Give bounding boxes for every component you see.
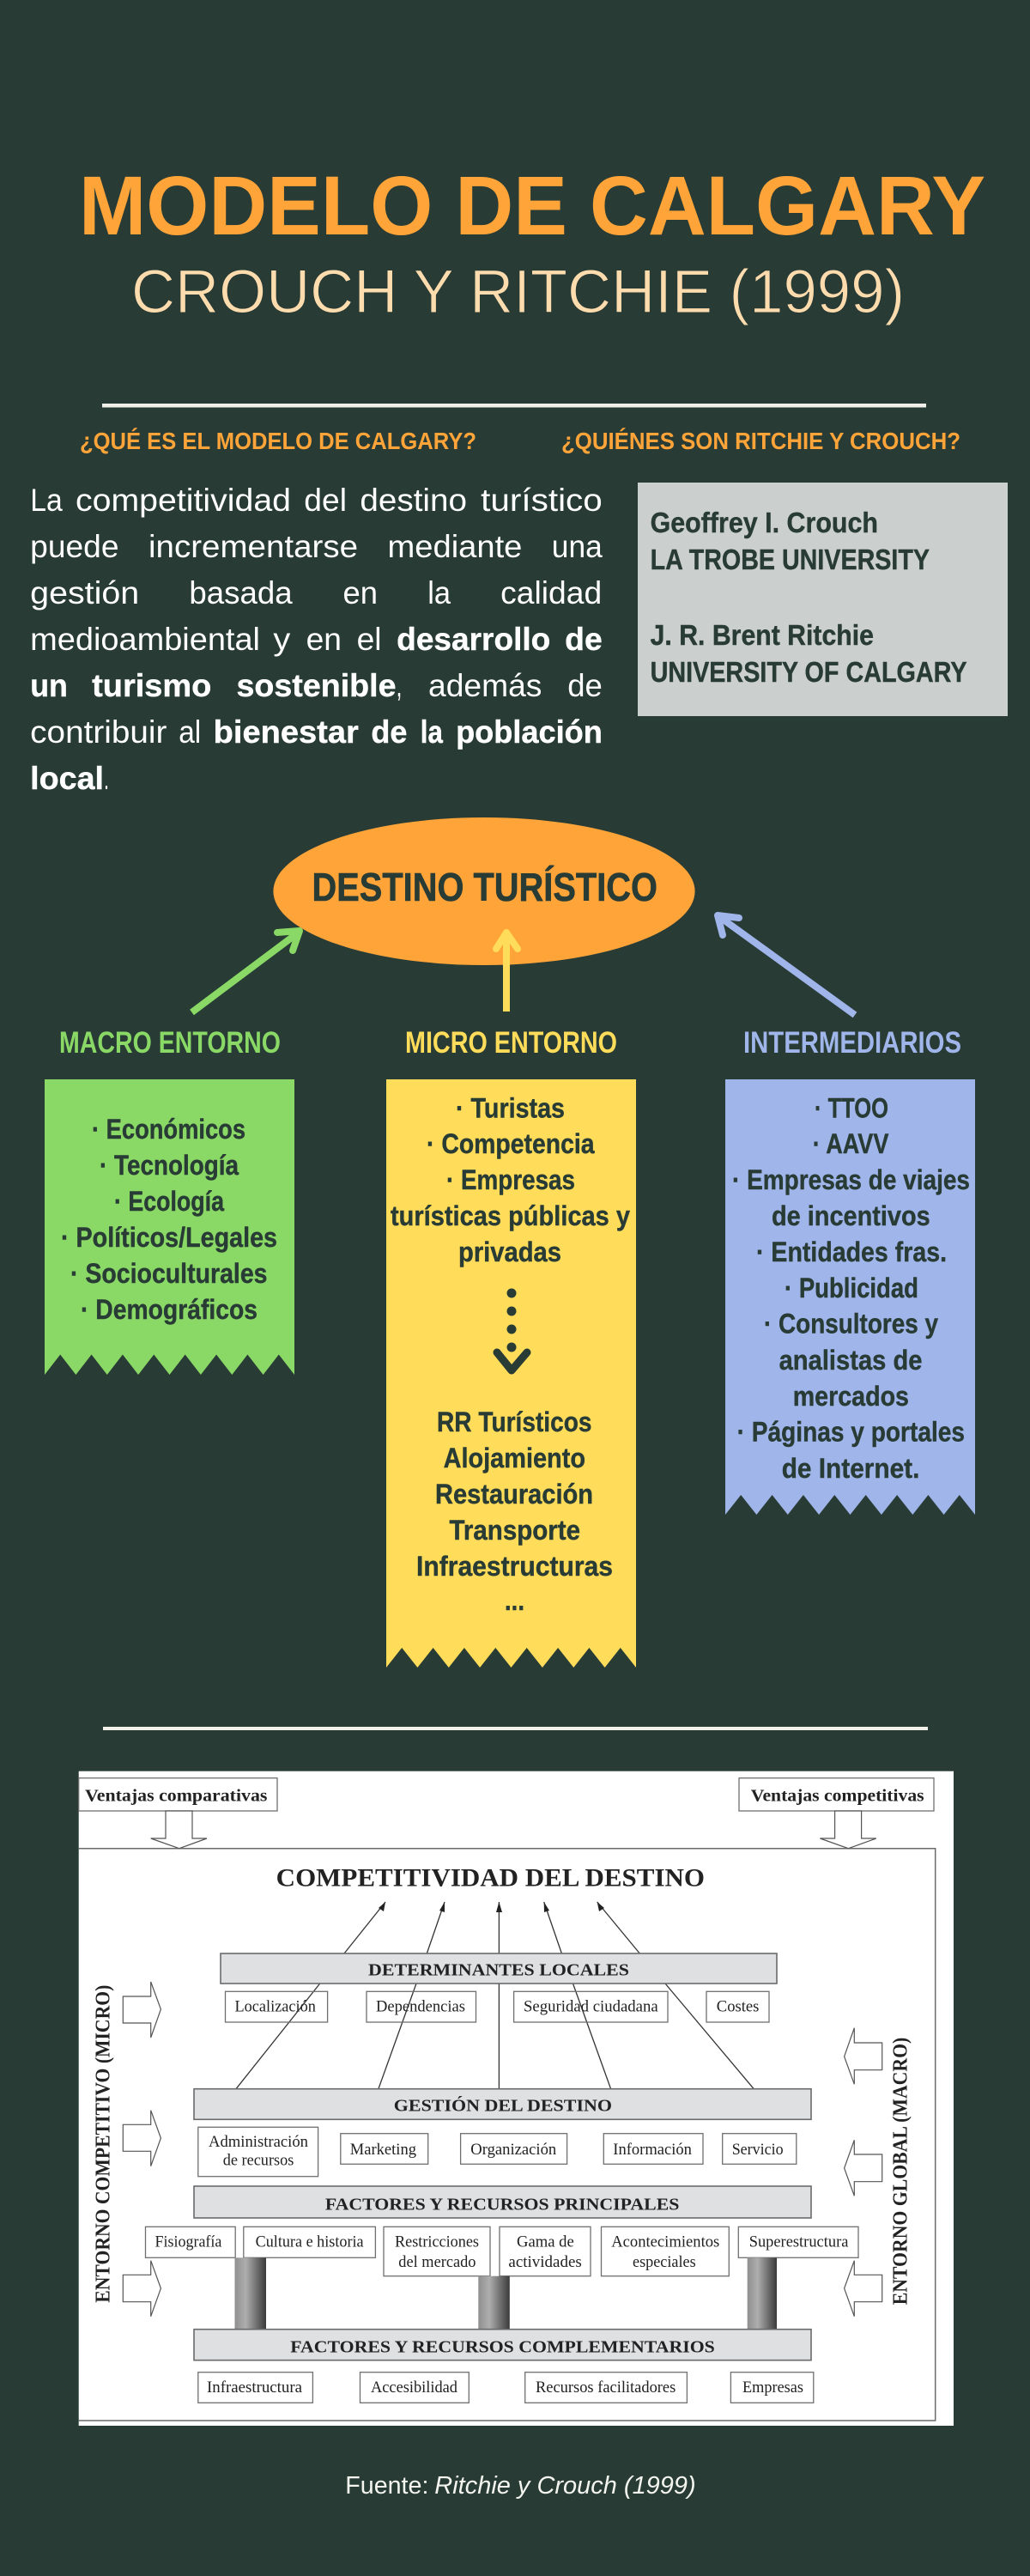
- panel: intermediarios: de incentivos: [772, 1200, 930, 1231]
- box: gama de actividades: actividades: [508, 2253, 582, 2271]
- text block: definition paragraph: la: [427, 575, 451, 611]
- panel: micro entorno: ...: [505, 1585, 524, 1616]
- text block: definition paragraph: mediante: [388, 529, 522, 564]
- subtitle: CROUCH Y RITCHIE (1999): [131, 258, 905, 326]
- panel: macro entorno: · Demográficos: [81, 1294, 258, 1325]
- box: ventajas comparativas: Ventajas comparativas: [85, 1786, 268, 1805]
- panel: micro entorno: RR Turísticos: [437, 1406, 592, 1437]
- arrow: comparativas down: [151, 1811, 207, 1849]
- box: seguridad ciudadana: Seguridad ciudadana: [524, 1998, 658, 2016]
- text block: definition paragraph: turístico: [481, 483, 603, 518]
- panel: intermediarios: · Páginas y portales: [737, 1417, 965, 1448]
- panel: intermediarios: · Empresas de viajes: [732, 1164, 970, 1195]
- text block: definition paragraph: en: [306, 622, 342, 657]
- box: administración de recursos: de recursos: [223, 2152, 294, 2170]
- panel: micro entorno: [386, 1079, 636, 1668]
- panel: intermediarios: de Internet.: [782, 1453, 919, 1484]
- box: seguridad ciudadana: [514, 1991, 668, 2022]
- box: acontecimientos especiales: [601, 2227, 729, 2276]
- box: información: Información: [613, 2141, 692, 2159]
- box: ventajas comparativas: [79, 1778, 277, 1811]
- box: restricciones del mercado: [384, 2227, 490, 2276]
- box: gama de actividades: Gama de: [517, 2233, 574, 2251]
- box: ventajas competitivas: Ventajas competitivas: [751, 1786, 924, 1805]
- text block: definition paragraph: gestión: [30, 575, 139, 611]
- bar: gestión del destino: GESTIÓN DEL DESTINO: [394, 2094, 612, 2115]
- box: gama de actividades: [500, 2227, 591, 2276]
- panel: intermediarios: analistas de: [779, 1345, 922, 1376]
- text block: definition paragraph: en: [343, 575, 378, 611]
- box: cultura e historia: Cultura e historia: [256, 2233, 364, 2251]
- box: restricciones del mercado: del mercado: [398, 2253, 476, 2271]
- destination ellipse: [273, 817, 695, 965]
- bar: determinantes locales: DETERMINANTES LOCALES: [368, 1961, 629, 1980]
- author: Crouch: LA TROBE UNIVERSITY: [651, 544, 930, 575]
- bar: factores y recursos principales: FACTORES Y RECURSOS PRINCIPALES: [325, 2195, 679, 2214]
- box: restricciones del mercado: Restricciones: [395, 2233, 479, 2251]
- box: costes: [706, 1991, 769, 2022]
- question heading: authors: ¿QUIÉNES SON RITCHIE Y CROUCH?: [561, 428, 960, 454]
- panel: intermediarios: mercados: [793, 1381, 909, 1412]
- text block: definition paragraph: puede: [30, 529, 119, 564]
- box: infraestructura: [198, 2372, 312, 2403]
- panel: authors: [638, 483, 1008, 716]
- text block: definition paragraph: .: [104, 761, 109, 796]
- question heading: model: ¿QUÉ ES EL MODELO DE CALGARY?: [80, 428, 476, 454]
- arrows: macro environment inward: [845, 2028, 882, 2317]
- box: empresas: Empresas: [742, 2379, 803, 2397]
- box: localización: Localización: [235, 1998, 316, 2016]
- box: administración de recursos: Administración: [209, 2133, 308, 2151]
- text block: definition paragraph: de: [371, 714, 407, 750]
- box: dependencias: Dependencias: [376, 1998, 465, 2016]
- box: accesibilidad: [360, 2372, 469, 2403]
- box: administración de recursos: [198, 2127, 318, 2177]
- panel: micro entorno: privadas: [458, 1236, 561, 1267]
- text block: definition paragraph: calidad: [500, 575, 602, 611]
- box: recursos facilitadores: Recursos facilitadores: [536, 2379, 676, 2397]
- panel: micro entorno: Alojamiento: [444, 1443, 585, 1473]
- text block: definition paragraph: población: [456, 714, 603, 750]
- column: left pillar: [235, 2257, 266, 2330]
- text block: definition paragraph: basada: [189, 575, 293, 611]
- text block: definition paragraph: medioambiental: [30, 622, 260, 657]
- text block: definition paragraph: incrementarse: [148, 529, 358, 564]
- panel: intermediarios: [725, 1079, 975, 1515]
- box: dependencias: [367, 1991, 476, 2022]
- box: marketing: [341, 2134, 428, 2164]
- box: servicio: [723, 2134, 797, 2164]
- text block: definition paragraph: bienestar: [214, 714, 359, 750]
- bar: determinantes locales: [221, 1953, 777, 1984]
- text block: definition paragraph: la: [421, 714, 443, 750]
- column: centre pillar: [478, 2276, 510, 2330]
- panel: macro entorno: · Políticos/Legales: [61, 1222, 277, 1253]
- panel: macro entorno: · Económicos: [92, 1114, 245, 1145]
- panel: micro entorno: · Turistas: [456, 1093, 565, 1124]
- text block: definition paragraph: una: [552, 529, 603, 564]
- box: marketing: Marketing: [350, 2141, 416, 2159]
- text block: definition paragraph: La: [30, 483, 63, 518]
- box: información: [603, 2134, 703, 2164]
- panel: micro entorno: turísticas públicas y: [391, 1200, 630, 1231]
- author: Crouch: [651, 507, 930, 575]
- destination ellipse: DESTINO TURÍSTICO: [312, 865, 657, 909]
- author: Crouch: Geoffrey I. Crouch: [651, 507, 878, 538]
- text block: definition paragraph: [30, 483, 603, 796]
- label: entorno competitivo: ENTORNO COMPETITIVO (MICRO): [93, 1985, 115, 2303]
- arrow: intermediaries to destination: [718, 915, 855, 1015]
- panel: micro entorno: Infraestructuras: [416, 1551, 613, 1582]
- box: recursos facilitadores: [525, 2372, 687, 2403]
- text block: definition paragraph: sostenible: [237, 668, 397, 703]
- author: Ritchie: [651, 619, 966, 688]
- text block: definition paragraph: contribuir: [30, 714, 167, 750]
- text block: definition paragraph: turismo: [92, 668, 211, 703]
- bar: factores y recursos complementarios: FACTORES Y RECURSOS COMPLEMENTARIOS: [290, 2337, 715, 2356]
- box: superestructura: Superestructura: [749, 2233, 849, 2251]
- box: costes: Costes: [717, 1998, 759, 2016]
- box: organización: [461, 2134, 567, 2164]
- heading: macro entorno: MACRO ENTORNO: [59, 1026, 281, 1060]
- box: empresas: [730, 2372, 814, 2403]
- box: fisiografía: Fisiografía: [154, 2233, 222, 2251]
- box: acontecimientos especiales: Acontecimientos: [611, 2233, 719, 2251]
- text block: definition paragraph: destino: [360, 483, 467, 518]
- box: infraestructura: Infraestructura: [207, 2379, 303, 2397]
- box: organización: Organización: [470, 2141, 557, 2159]
- panel: intermediarios: · Publicidad: [785, 1273, 918, 1303]
- panel: micro entorno: Restauración: [435, 1479, 593, 1510]
- box: acontecimientos especiales: especiales: [633, 2253, 696, 2271]
- text block: definition paragraph: además: [428, 668, 542, 703]
- arrows: micro environment inward: [123, 1982, 161, 2317]
- text block: definition paragraph: del: [304, 483, 347, 518]
- box: cultura e historia: [244, 2227, 375, 2257]
- bar: factores y recursos complementarios: [194, 2330, 811, 2360]
- diagram title: COMPETITIVIDAD DEL DESTINO: [276, 1864, 705, 1893]
- text block: definition paragraph: ,: [397, 668, 402, 703]
- text block: definition paragraph: y: [273, 622, 291, 657]
- text block: definition paragraph: de: [565, 622, 603, 657]
- arrow: micro to destination: [496, 933, 518, 1012]
- text block: definition paragraph: competitividad: [76, 483, 291, 518]
- panel: macro entorno: [45, 1079, 294, 1375]
- source note: Ritchie y Crouch (1999): [434, 2472, 696, 2500]
- icon: dotted down arrow: [497, 1288, 527, 1370]
- bar: gestión del destino: [194, 2089, 811, 2119]
- author: Ritchie: J. R. Brent Ritchie: [651, 619, 874, 651]
- arrow: macro to destination: [192, 931, 300, 1012]
- panel: micro entorno: · Empresas: [446, 1164, 575, 1195]
- box: superestructura: [738, 2227, 858, 2257]
- bar: factores y recursos principales: [194, 2186, 811, 2218]
- heading: micro entorno: MICRO ENTORNO: [405, 1026, 617, 1060]
- text block: definition paragraph: de: [567, 668, 603, 703]
- source note: Fuente:: [345, 2472, 428, 2500]
- panel: intermediarios: · Consultores y: [764, 1309, 938, 1340]
- heading: intermediarios: INTERMEDIARIOS: [743, 1026, 961, 1060]
- label: entorno global: ENTORNO GLOBAL (MACRO): [889, 2038, 912, 2305]
- box: accesibilidad: Accesibilidad: [371, 2379, 457, 2397]
- box: ventajas competitivas: [739, 1778, 934, 1811]
- panel: macro entorno: · Ecología: [114, 1186, 224, 1217]
- box: fisiografía: [146, 2227, 235, 2257]
- text block: definition paragraph: local: [30, 761, 104, 796]
- column: right pillar: [748, 2257, 777, 2330]
- text block: definition paragraph: un: [30, 668, 68, 703]
- panel: micro entorno: Transporte: [450, 1515, 580, 1546]
- arrow: competitivas down: [820, 1811, 876, 1849]
- arrows: to competitiveness: [344, 1902, 639, 1953]
- panel: intermediarios: · Entidades fras.: [756, 1236, 947, 1267]
- panel: macro entorno: · Socioculturales: [70, 1258, 268, 1289]
- box: localización: [225, 1991, 328, 2022]
- diagram: Calgary competitiveness model: [79, 1771, 954, 2426]
- panel: micro entorno: · Competencia: [427, 1128, 595, 1159]
- panel: intermediarios: · TTOO: [815, 1093, 888, 1124]
- author: Ritchie: UNIVERSITY OF CALGARY: [651, 656, 966, 688]
- text block: definition paragraph: al: [179, 714, 201, 750]
- box: servicio: Servicio: [732, 2141, 784, 2159]
- panel: intermediarios: · AAVV: [813, 1128, 889, 1159]
- panel: macro entorno: · Tecnología: [100, 1150, 239, 1181]
- title: MODELO DE CALGARY: [79, 159, 985, 252]
- text block: definition paragraph: desarrollo: [397, 622, 550, 657]
- arrows: management to determinants: [236, 1984, 754, 2089]
- text block: definition paragraph: el: [357, 622, 382, 657]
